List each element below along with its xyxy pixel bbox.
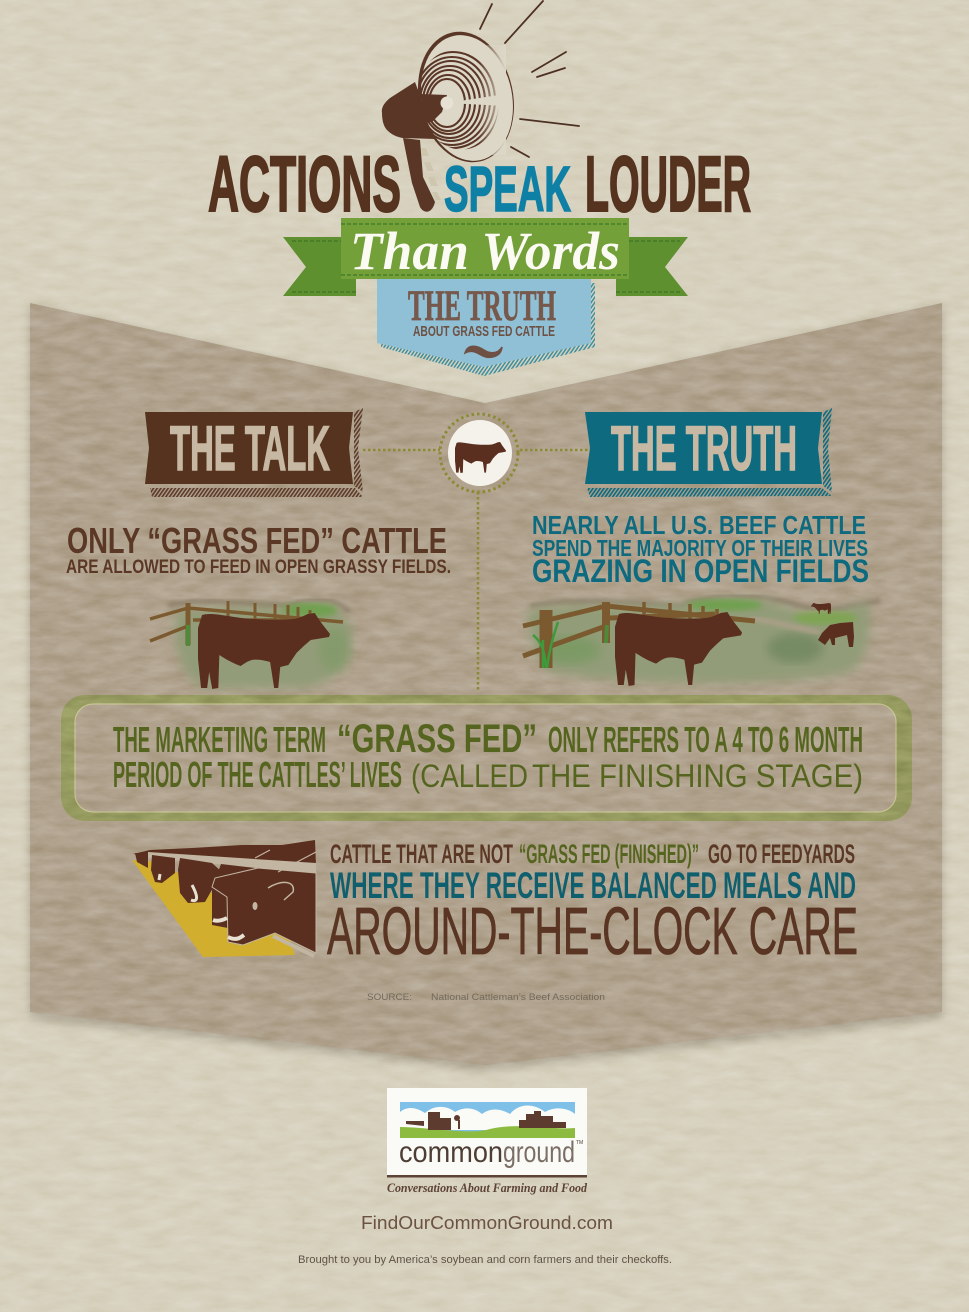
- icon: flourish: [465, 346, 502, 357]
- callout text: THE FINISHING STAGE): [532, 758, 863, 794]
- text block: feedyards: CATTLE THAT ARE NOT: [330, 839, 513, 869]
- text block: feedyards: “GRASS FED (FINISHED)”: [519, 839, 699, 869]
- title line: SPEAK: [444, 153, 571, 225]
- sponsor line: Brought to you by America’s soybean and corn farmers and their checkoffs.: [298, 1254, 672, 1266]
- website url: FindOurCommonGround.com: [361, 1213, 613, 1233]
- title line: [208, 139, 751, 228]
- source credit: SOURCE:: [367, 992, 412, 1003]
- pocket: the truth about grass fed cattle: [377, 279, 595, 376]
- text block: feedyards: GO TO FEEDYARDS: [708, 839, 855, 869]
- text block: the talk claim: ONLY “GRASS FED” CATTLE: [67, 520, 447, 561]
- text: LOUDER: [585, 139, 751, 228]
- callout text: [113, 717, 863, 795]
- callout text: (CALLED: [411, 758, 528, 794]
- callout frame: grass fed definition box: [61, 695, 912, 821]
- panel: main content chevron: [30, 303, 942, 1070]
- connector: dotted lines: [363, 450, 590, 692]
- source credit: National Cattleman’s Beef Association: [431, 992, 605, 1003]
- ribbon: than words: Than Words: [350, 221, 620, 281]
- header group: [208, 1, 751, 376]
- text block: the truth claim: SPEND THE MAJORITY OF THEIR LIVES: [532, 535, 868, 561]
- text block: feedyards: [327, 839, 858, 969]
- banner: the truth: [585, 408, 832, 497]
- illustration: cattle at feed bunk: [132, 840, 316, 957]
- text block: the truth claim: GRAZING IN OPEN FIELDS: [532, 553, 869, 589]
- callout text: PERIOD OF THE CATTLES’ LIVES: [113, 754, 402, 795]
- illustration: cattle in open fields: [523, 596, 880, 686]
- text block: the truth claim: NEARLY ALL U.S. BEEF CATTLE: [532, 510, 866, 540]
- banner: the talk: THE TALK: [170, 414, 330, 484]
- banner: the truth: THE TRUTH: [611, 414, 797, 484]
- callout text: THE MARKETING TERM: [113, 719, 326, 760]
- icon: cow in circle: [440, 414, 518, 492]
- logo: common ground: [387, 1088, 587, 1178]
- title line: ACTIONS: [208, 139, 401, 228]
- logo: common ground: ground: [503, 1136, 575, 1169]
- text block: the talk claim: ARE ALLOWED TO FEED IN OPEN GRASSY FIELDS.: [66, 557, 451, 578]
- source credit: [367, 992, 605, 1003]
- text block: the talk claim: [66, 520, 451, 578]
- logo: common ground: common: [399, 1136, 503, 1169]
- text block: the truth claim: [532, 510, 869, 589]
- icon: megaphone: [382, 1, 579, 212]
- callout text: “GRASS FED”: [337, 717, 537, 761]
- logo: common ground: TM: [576, 1140, 583, 1146]
- banner: the talk: [145, 408, 363, 497]
- pocket: the truth about grass fed cattle: ABOUT GRASS FED CATTLE: [413, 323, 555, 340]
- illustration: single cow in pasture: [150, 600, 352, 689]
- pocket: the truth about grass fed cattle: THE TRUTH: [408, 283, 556, 330]
- ribbon: than words: [283, 218, 688, 296]
- logo tagline: Conversations About Farming and Food: [387, 1181, 588, 1195]
